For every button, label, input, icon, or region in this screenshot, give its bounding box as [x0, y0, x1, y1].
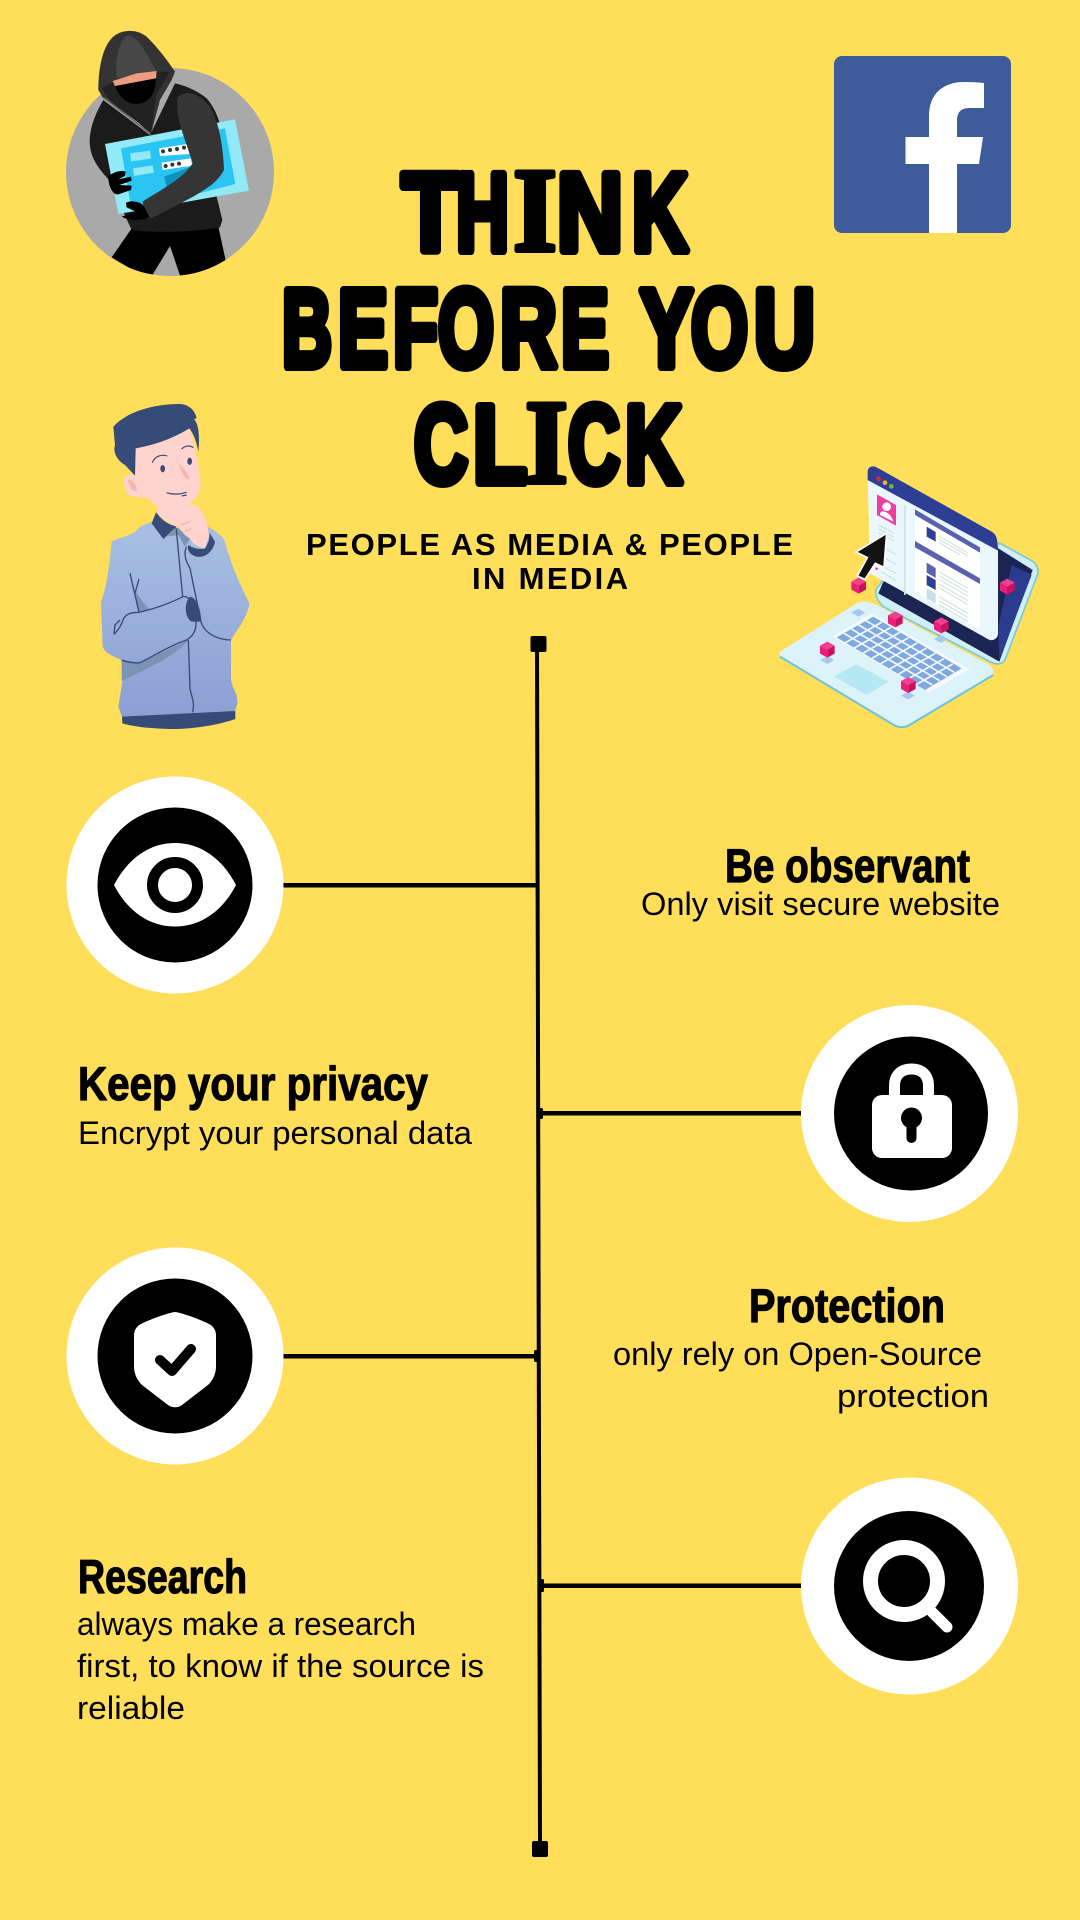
title: R	[500, 268, 557, 390]
icon: padlock	[801, 1005, 1018, 1222]
heading: Be observant	[725, 839, 970, 892]
connector	[283, 1354, 538, 1358]
icon: magnifying glass	[801, 1478, 1018, 1694]
title: C	[414, 384, 468, 506]
description: first, to know if the source is	[77, 1648, 484, 1684]
subtitle: IN MEDIA	[472, 561, 628, 596]
title: K	[625, 384, 682, 506]
heading: Keep your privacy	[78, 1057, 428, 1110]
description: only rely on Open-Source	[613, 1336, 982, 1372]
title: K	[632, 152, 688, 274]
illustration: laptop with social media page	[779, 466, 1038, 727]
icon: eye	[66, 776, 284, 994]
timeline	[530, 636, 548, 1857]
heading: Research	[78, 1550, 247, 1603]
item: research	[77, 1478, 1018, 1726]
title: O	[438, 268, 494, 390]
title: I	[525, 376, 568, 508]
illustration: hacker stealing password	[66, 31, 274, 283]
icon: facebook logo	[834, 56, 1011, 233]
title: I	[513, 144, 557, 276]
description	[77, 1606, 484, 1726]
description: always make a research	[77, 1606, 416, 1642]
title: B	[282, 268, 332, 390]
title: Y	[640, 268, 693, 390]
item: protection	[66, 1248, 989, 1464]
description: reliable	[77, 1690, 185, 1726]
title: E	[561, 268, 609, 390]
title: T	[402, 152, 459, 274]
illustration: thinking man	[101, 404, 249, 729]
title: F	[393, 268, 438, 390]
connector	[540, 1584, 801, 1588]
icon: shield with check	[66, 1248, 284, 1464]
description	[613, 1336, 989, 1414]
title: E	[338, 268, 388, 390]
title: C	[568, 384, 620, 506]
item: keep your privacy	[78, 1005, 1018, 1222]
title: N	[557, 152, 623, 274]
description: protection	[837, 1378, 989, 1414]
description: Only visit secure website	[641, 886, 1000, 922]
item: be observant	[66, 776, 1000, 994]
subtitle	[306, 527, 793, 596]
heading: Protection	[749, 1279, 945, 1332]
title: U	[754, 268, 815, 390]
description: Encrypt your personal data	[78, 1115, 472, 1151]
title: O	[691, 268, 748, 390]
title	[282, 144, 815, 508]
connector	[283, 883, 538, 888]
title: L	[473, 384, 527, 506]
connector	[540, 1111, 801, 1116]
title: H	[456, 152, 509, 274]
subtitle: PEOPLE AS MEDIA & PEOPLE	[306, 527, 793, 562]
